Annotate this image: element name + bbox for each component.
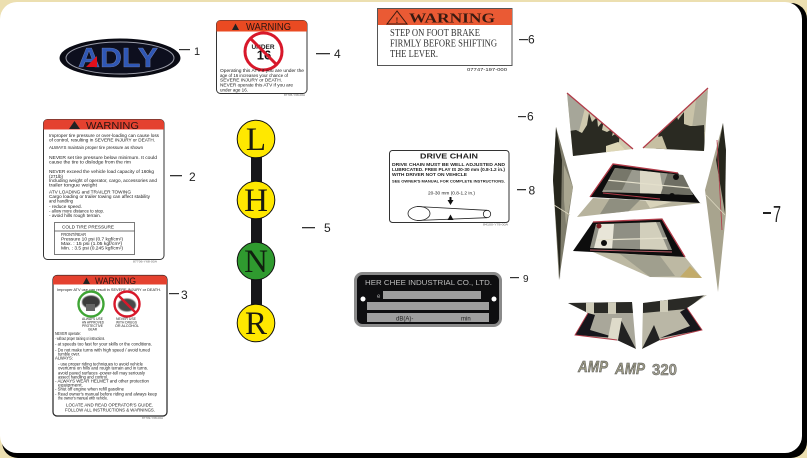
warning header	[44, 120, 164, 132]
plate body	[356, 274, 500, 326]
item 2: tire warning label	[44, 120, 196, 264]
instructions	[392, 162, 506, 184]
part code: 07747-197-000	[467, 67, 508, 72]
callout number 8: 8	[528, 184, 536, 198]
warning text	[49, 133, 159, 218]
callout number 9: 9	[523, 274, 529, 285]
warning text: - allow more distance to stop.	[49, 208, 104, 214]
gear R	[237, 304, 275, 342]
callout number 7: 7	[773, 201, 781, 227]
item 1: ADLY oval logo	[60, 38, 200, 78]
part code: 87705-Y68-00A	[284, 93, 305, 97]
callout number 1	[179, 46, 200, 58]
item 9: identification plate	[356, 274, 529, 326]
noise field	[367, 313, 489, 322]
decal: model badges	[577, 359, 677, 379]
instructions text: - use proper riding techniques to avoid vehicle	[58, 362, 144, 366]
instructions: SEE OWNER'S MANUAL FOR COMPLETE INSTRUCTIONS.	[392, 180, 505, 184]
instructions text: - ALWAYS WEAR HELMET and other protection	[55, 378, 150, 384]
warning text: - avoid hills rough terrain.	[49, 213, 101, 218]
icon: no drugs or alcohol	[114, 292, 140, 316]
noise field: dB(A)-	[396, 316, 413, 322]
instructions: WITH DRIVER NOT ON VEHICLE	[392, 172, 467, 177]
callout number 3	[169, 288, 188, 302]
decal: top right triangle	[643, 88, 708, 155]
part code: 87709-Y68-00A	[142, 416, 163, 420]
manufacturer name: HER CHEE INDUSTRIAL CO., LTD.	[365, 280, 492, 287]
cold tire pressure table: COLD TIRE PRESSURE	[62, 224, 114, 230]
gear H: H	[244, 183, 268, 219]
icon captions: AN APPROVED	[82, 320, 104, 324]
warning header	[378, 9, 512, 26]
cold tire pressure table: Pressure 10 psi (0.7 kgf/cm²)	[61, 236, 124, 242]
decal: model badges: 320	[652, 362, 677, 379]
instructions: DRIVE CHAIN MUST BE WELL ADJUSTED AND	[392, 162, 506, 167]
warning header: WARNING	[246, 22, 291, 33]
item 6: foot brake warning label	[378, 8, 535, 72]
item 3: ATV use warning label	[53, 276, 188, 420]
warning text: under age 16.	[220, 88, 248, 92]
icon: under 16 prohibition	[245, 33, 282, 70]
warning text: SEVERE INJURY or DEATH.	[220, 78, 282, 82]
instructions text: FOLLOW ALL INSTRUCTIONS & WARNINGS.	[65, 408, 155, 412]
warning text: and handling	[49, 198, 74, 204]
gear L	[237, 120, 275, 158]
warning text: NEVER set tire pressure below minimum. It could	[49, 155, 158, 160]
warning text: Improper tire pressure or over-loading can cause loss	[49, 133, 159, 138]
label body	[390, 150, 509, 222]
warning text	[220, 68, 305, 92]
item 4: under 16 warning label	[216, 20, 341, 97]
callout number 5: 5	[324, 221, 331, 235]
label body	[44, 120, 164, 260]
logo badge	[60, 38, 180, 78]
icon captions: OR ALCOHOL	[115, 324, 139, 328]
warning header: WARNING	[95, 276, 136, 287]
callout number 3: 3	[181, 288, 188, 302]
icon captions: GEAR	[88, 328, 97, 332]
warning header	[53, 276, 167, 287]
cold tire pressure table: Max. : 15 psi (1.05 kgf/cm²)	[61, 241, 123, 246]
instructions text: - Read owner's manual before riding and always keep	[55, 392, 158, 396]
icon: under 16 prohibition: 16	[257, 48, 271, 62]
label body	[53, 276, 167, 416]
instructions text: equipment.	[58, 382, 83, 388]
gear H	[237, 181, 275, 219]
label body	[378, 8, 512, 66]
decal: model badges: AMP	[577, 359, 608, 376]
chain diagram: 20-30 mm (0.8-1.2 in.)	[428, 190, 476, 196]
warning text: ALWAYS maintain proper tire pressure as shown	[49, 145, 144, 150]
brake instructions	[390, 28, 497, 60]
decal: model badges: AMP	[614, 361, 645, 378]
warning text: Operating this ATV if you are under the	[220, 68, 305, 73]
decal: right sliver	[705, 123, 726, 292]
icon captions: NEVER USE	[116, 317, 137, 321]
gear N: N	[244, 244, 268, 280]
label heading: DRIVE CHAIN	[420, 154, 478, 160]
icon: wear protective gear	[78, 292, 104, 316]
instructions text: NEVER operate:	[55, 331, 81, 336]
icon captions	[82, 317, 139, 332]
gear L: L	[246, 122, 266, 158]
callout number 6	[519, 32, 535, 46]
warning text: NEVER exceed the vehicle load capacity of 160kg	[49, 169, 155, 174]
decal: left sliver	[553, 127, 573, 280]
instructions text	[55, 331, 158, 412]
callout number 4: 4	[334, 47, 341, 61]
callout number 2	[170, 170, 196, 184]
warning header: !	[396, 16, 398, 25]
warning text: of control, resulting in SEVERE INJURY or DEATH.	[49, 138, 155, 142]
decal: bottom right panel	[642, 293, 707, 349]
instructions text: tumble over.	[58, 352, 80, 356]
instructions text: overturns on hills and rough terrain and in turns.	[58, 366, 148, 370]
instructions text: - without proper training or instructions.	[55, 336, 105, 341]
mounting holes	[360, 296, 496, 302]
label body	[216, 20, 307, 94]
instructions text: LOCATE AND READ OPERATOR'S GUIDE.	[66, 402, 153, 408]
instructions text: assect handling and control.	[58, 374, 108, 380]
part code: 87706-Y68-00A	[133, 260, 157, 264]
warning text: Cargo loading or trailer towing can affect stability	[49, 194, 151, 199]
icon: under 16 prohibition: UNDER	[251, 44, 275, 51]
callout number 7	[763, 201, 781, 227]
gear N	[237, 242, 275, 280]
item 8: drive chain label	[390, 150, 536, 226]
intro text: Improper ATV use can result in SEVERE INJURY or DEATH.	[57, 287, 161, 292]
cold tire pressure table	[54, 222, 134, 254]
blank field	[367, 302, 489, 310]
serial field	[377, 291, 481, 300]
chain diagram	[408, 190, 491, 220]
decal: top left triangle	[567, 93, 633, 158]
part code: 84100-Y78-00A	[483, 222, 508, 226]
item 7: camouflage decal set	[553, 88, 726, 379]
warning text: NEVER operate this ATV if you are	[220, 82, 294, 88]
callout number 6 second: 6	[527, 110, 534, 124]
decal: center upper panel	[577, 164, 702, 217]
callout number 9	[510, 274, 529, 285]
instructions text: avoid paved surfaces -power-tell may seriously	[58, 370, 146, 376]
warning header: WARNING	[409, 12, 495, 26]
warning text: (271lb)	[49, 174, 64, 179]
instructions text: - Shut off engine when refill gasoline	[55, 386, 125, 392]
decal: bottom left panel	[566, 300, 638, 349]
cold tire pressure table: Min. : 3.5 psi (0.245 kgf/cm²)	[61, 246, 124, 250]
instructions text: ALWAYS:	[55, 356, 73, 360]
icon captions: WITH DRUGS	[116, 320, 138, 324]
brake instructions: FIRMLY BEFORE SHIFTING	[390, 38, 497, 50]
icon captions: ALWAYS USE	[82, 317, 104, 321]
icon captions: PROTECTIVE	[82, 324, 104, 328]
callout number 8	[517, 184, 536, 198]
instructions: LUBRICATED. FREE PLAY IS 20-30 mm (0.8-1.2 in.)	[392, 167, 505, 172]
warning text: cause the tire to dislodge from the rim	[49, 160, 132, 164]
warning text: - reduce speed.	[49, 204, 82, 209]
noise field: min	[461, 316, 471, 322]
serial field: e	[377, 294, 381, 300]
callout number 1: 1	[194, 46, 200, 58]
item 5: gear indicator	[237, 120, 331, 342]
callout number 2: 2	[189, 170, 196, 184]
warning text: age of 16 increases your chance of	[220, 73, 289, 78]
callout number 6: 6	[528, 32, 535, 46]
gear R: R	[245, 306, 267, 342]
warning text: ATV LOADING and TRAILER TOWING	[49, 190, 131, 194]
instructions text: - Do not make turns with high speed / avoid tuned	[55, 348, 151, 352]
callout number 5	[302, 221, 331, 235]
gear bar	[251, 139, 262, 323]
cold tire pressure table: FRONT/REAR	[61, 232, 86, 237]
decal: center lower panel	[573, 219, 704, 280]
warning header: WARNING	[86, 120, 139, 132]
warning text: Including weight of operator, cargo, accessories and	[49, 178, 158, 183]
warning text: trailer tongue weight	[49, 182, 98, 188]
logo badge: ADLY	[78, 42, 158, 73]
callout number 6 second	[518, 110, 534, 124]
instructions text: - at speeds too fast for your skills or the conditions.	[55, 342, 152, 346]
instructions text: the owner's manual with vehicle.	[58, 396, 108, 400]
brake instructions: THE LEVER.	[390, 49, 438, 60]
brake instructions: STEP ON FOOT BRAKE	[390, 28, 480, 39]
